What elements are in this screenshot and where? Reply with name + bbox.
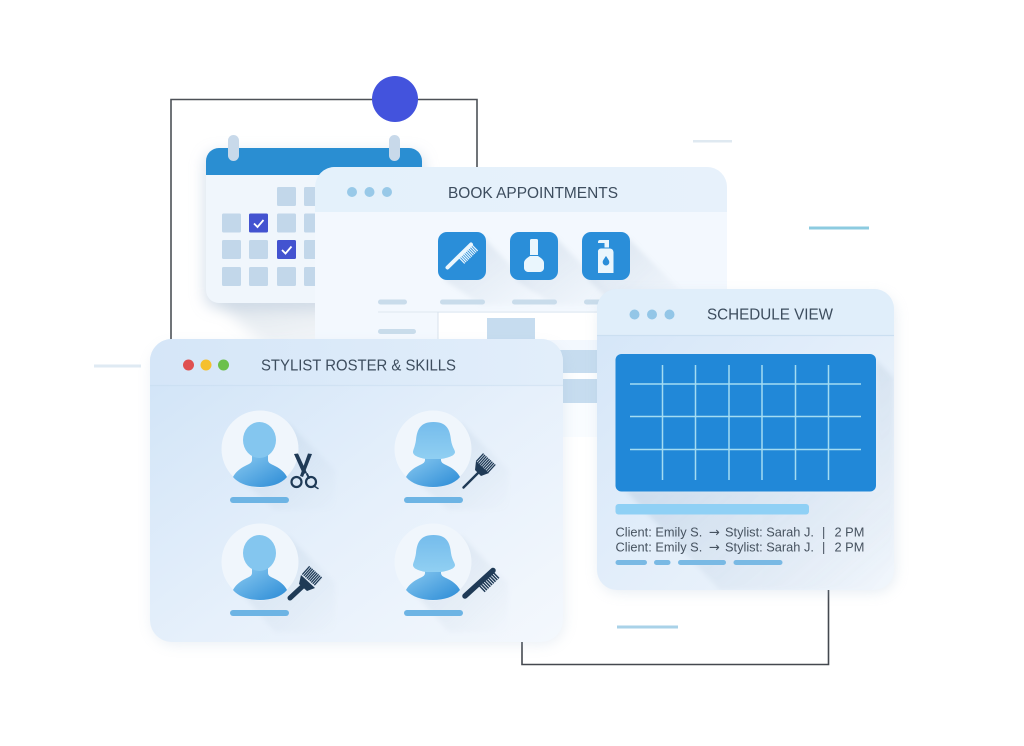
checked day one <box>249 214 268 232</box>
frame outline bottom <box>522 585 828 664</box>
calendar ring left <box>228 135 239 161</box>
schedule heading: SCHEDULE VIEW <box>707 306 833 324</box>
schedule window dots <box>630 310 674 320</box>
stylist heading: STYLIST ROSTER & SKILLS <box>261 358 456 374</box>
appointment line two: | <box>822 540 825 554</box>
schedule panel header <box>597 289 894 335</box>
decorative line: top right short <box>693 140 732 142</box>
decorative line: left <box>94 364 141 368</box>
icon: nail polish <box>510 232 558 280</box>
stylist card: dye brush <box>394 410 508 510</box>
panel: schedule view <box>597 289 894 590</box>
stylist card: scissors <box>222 410 335 510</box>
calendar shadow <box>204 152 470 350</box>
book panel header <box>315 167 727 212</box>
appointment line two: Client: Emily S. <box>616 540 702 554</box>
grid long shadow <box>625 360 894 590</box>
stylist card: tint brush <box>222 524 335 632</box>
schedule grid <box>616 354 876 492</box>
appointment line two: 2 PM <box>834 540 864 554</box>
appointment line one: 2 PM <box>834 524 864 540</box>
book heading: BOOK APPOINTMENTS <box>448 185 618 202</box>
book panel body <box>315 167 727 437</box>
calendar body <box>206 148 422 303</box>
appointment table <box>378 300 604 437</box>
appointment line two: Stylist: Sarah J. <box>725 540 814 554</box>
stylist card: comb <box>394 524 508 632</box>
highlighted bar <box>616 504 809 514</box>
stylist panel header <box>150 339 563 385</box>
schedule panel body <box>597 289 894 590</box>
calendar day cells <box>222 187 323 286</box>
calendar header <box>206 148 422 175</box>
stylist panel body <box>150 339 563 642</box>
schedule header divider <box>597 334 894 336</box>
decorative line: right accent <box>809 226 869 230</box>
traffic light dots <box>183 360 229 370</box>
appointment line two: → <box>709 540 720 556</box>
appointment line one: | <box>822 524 825 540</box>
icon: pump bottle <box>582 232 630 280</box>
appointment line one: → <box>709 526 720 540</box>
header divider <box>150 384 563 386</box>
blue circle node <box>372 76 418 122</box>
icon long shadows <box>446 240 662 299</box>
icon: comb <box>438 232 486 280</box>
panel: stylist roster and skills <box>150 339 563 642</box>
appointment line one: Client: Emily S. <box>616 524 702 540</box>
calendar <box>204 135 470 350</box>
calendar ring right <box>389 135 400 161</box>
decorative line: bottom <box>617 626 678 628</box>
panel: book appointments <box>315 167 727 403</box>
small status bars <box>616 560 782 565</box>
book window dots <box>347 187 392 197</box>
appointment line one: Stylist: Sarah J. <box>725 524 814 540</box>
panel shadow: stylist roster <box>152 346 564 644</box>
checked day two <box>277 240 296 259</box>
frame outline top <box>171 100 477 340</box>
panel shadow: schedule view <box>599 295 895 592</box>
